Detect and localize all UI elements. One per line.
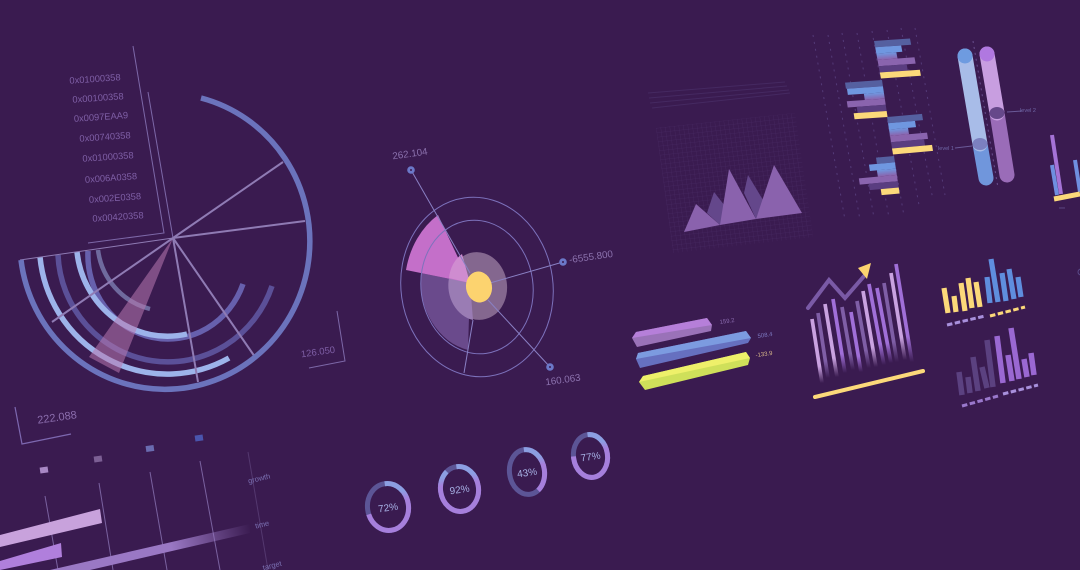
concentric arcs bbox=[40, 250, 272, 374]
outer arc bbox=[21, 98, 310, 389]
panel: radar chart bbox=[389, 147, 614, 388]
value 222.088: 222.088 bbox=[37, 409, 78, 427]
blue bar bbox=[636, 331, 751, 368]
address list: 0x00740358 bbox=[79, 130, 131, 144]
inner blob bbox=[445, 248, 511, 324]
yellow bar bbox=[639, 352, 750, 390]
stack 1 bbox=[874, 38, 921, 78]
highlighted wedge bbox=[89, 238, 173, 373]
stack 4 bbox=[856, 156, 900, 197]
panel: lower left bars bbox=[0, 407, 283, 570]
level labels: level 2 bbox=[1020, 108, 1036, 114]
address list: 0x01000358 bbox=[82, 150, 134, 164]
address list: 0x01000358 bbox=[69, 72, 121, 86]
stack 2 bbox=[844, 80, 888, 120]
panel: 3D bars bbox=[632, 318, 774, 390]
value 126.050: 126.050 bbox=[300, 345, 336, 360]
spokes bbox=[20, 162, 305, 382]
grid bbox=[656, 113, 813, 253]
donut 92%: 92% bbox=[449, 484, 470, 497]
panel: percentage donuts bbox=[364, 432, 610, 533]
axis dashes bbox=[947, 316, 985, 325]
dotted divider bbox=[973, 41, 998, 188]
dark bars bbox=[959, 340, 993, 395]
pink sector bbox=[406, 215, 470, 283]
donut 72% bbox=[364, 481, 412, 533]
leader lines bbox=[411, 170, 563, 373]
column lines bbox=[45, 452, 268, 570]
radar labels: 160.063 bbox=[545, 373, 582, 388]
panel: capsule level gauges bbox=[938, 41, 1036, 188]
dotted guides bbox=[813, 28, 945, 220]
yellow bars bbox=[944, 278, 980, 313]
radar labels: 262.104 bbox=[392, 147, 429, 162]
donut 43%: 43% bbox=[517, 467, 538, 480]
bars bbox=[0, 509, 102, 547]
donut 72%: 72% bbox=[378, 502, 399, 515]
address list: 0x006A0358 bbox=[85, 171, 137, 185]
value 126.050 bbox=[300, 311, 345, 368]
panel: small bar chart top bbox=[944, 259, 1025, 325]
blue bars bbox=[987, 259, 1021, 303]
panel: right edge bars: xxx bbox=[1059, 205, 1065, 210]
address list: 0x0097EAA9 bbox=[74, 110, 128, 124]
panel: small bar chart bottom bbox=[959, 328, 1038, 406]
frame lines bbox=[88, 46, 173, 243]
level labels: level 1 bbox=[938, 146, 954, 152]
purple bars bbox=[997, 328, 1034, 383]
stack 3 bbox=[887, 113, 933, 154]
baseline bbox=[815, 371, 923, 397]
node dots bbox=[407, 166, 567, 371]
address list bbox=[69, 72, 144, 224]
value 222.088 bbox=[15, 407, 78, 444]
panel: mountain chart bbox=[648, 82, 813, 253]
panel: trend column chart bbox=[808, 263, 923, 397]
trend arrow bbox=[808, 263, 871, 308]
icon: clipped ring at right edge bbox=[1078, 269, 1080, 275]
address list: 0x00100358 bbox=[72, 91, 124, 105]
light peaks bbox=[684, 165, 802, 232]
bar labels bbox=[719, 318, 774, 359]
axis dashes bbox=[962, 396, 998, 406]
donut 77% bbox=[571, 432, 610, 480]
purple bar bbox=[632, 318, 712, 347]
row labels: growth bbox=[247, 471, 271, 486]
panel: radial dial chart bbox=[20, 46, 345, 389]
header strip grid bbox=[648, 82, 790, 108]
panel: stacked rows chart bbox=[813, 28, 945, 220]
legend markers bbox=[40, 434, 203, 474]
donut 77%: 77% bbox=[580, 451, 601, 464]
radar labels: -6555.800 bbox=[568, 249, 614, 266]
bar labels: -133.9 bbox=[755, 351, 774, 359]
bar labels: 508.4 bbox=[757, 332, 774, 340]
donut 92% bbox=[438, 464, 481, 514]
center dot bbox=[464, 270, 494, 304]
address list: 0x002E0358 bbox=[89, 191, 141, 205]
bar labels: 159.2 bbox=[719, 318, 736, 326]
donut 43% bbox=[507, 447, 547, 497]
address list: 0x00420358 bbox=[92, 210, 144, 224]
blue capsule bbox=[958, 48, 988, 178]
dark peaks bbox=[707, 175, 763, 225]
fading columns bbox=[812, 264, 912, 383]
panel: right edge bars bbox=[1052, 135, 1080, 210]
radar labels bbox=[392, 147, 614, 388]
row labels bbox=[247, 471, 283, 570]
sectors bbox=[421, 273, 470, 350]
row labels: time bbox=[254, 518, 270, 531]
level labels bbox=[938, 108, 1036, 152]
rings bbox=[389, 187, 565, 387]
purple capsule bbox=[980, 46, 1007, 175]
